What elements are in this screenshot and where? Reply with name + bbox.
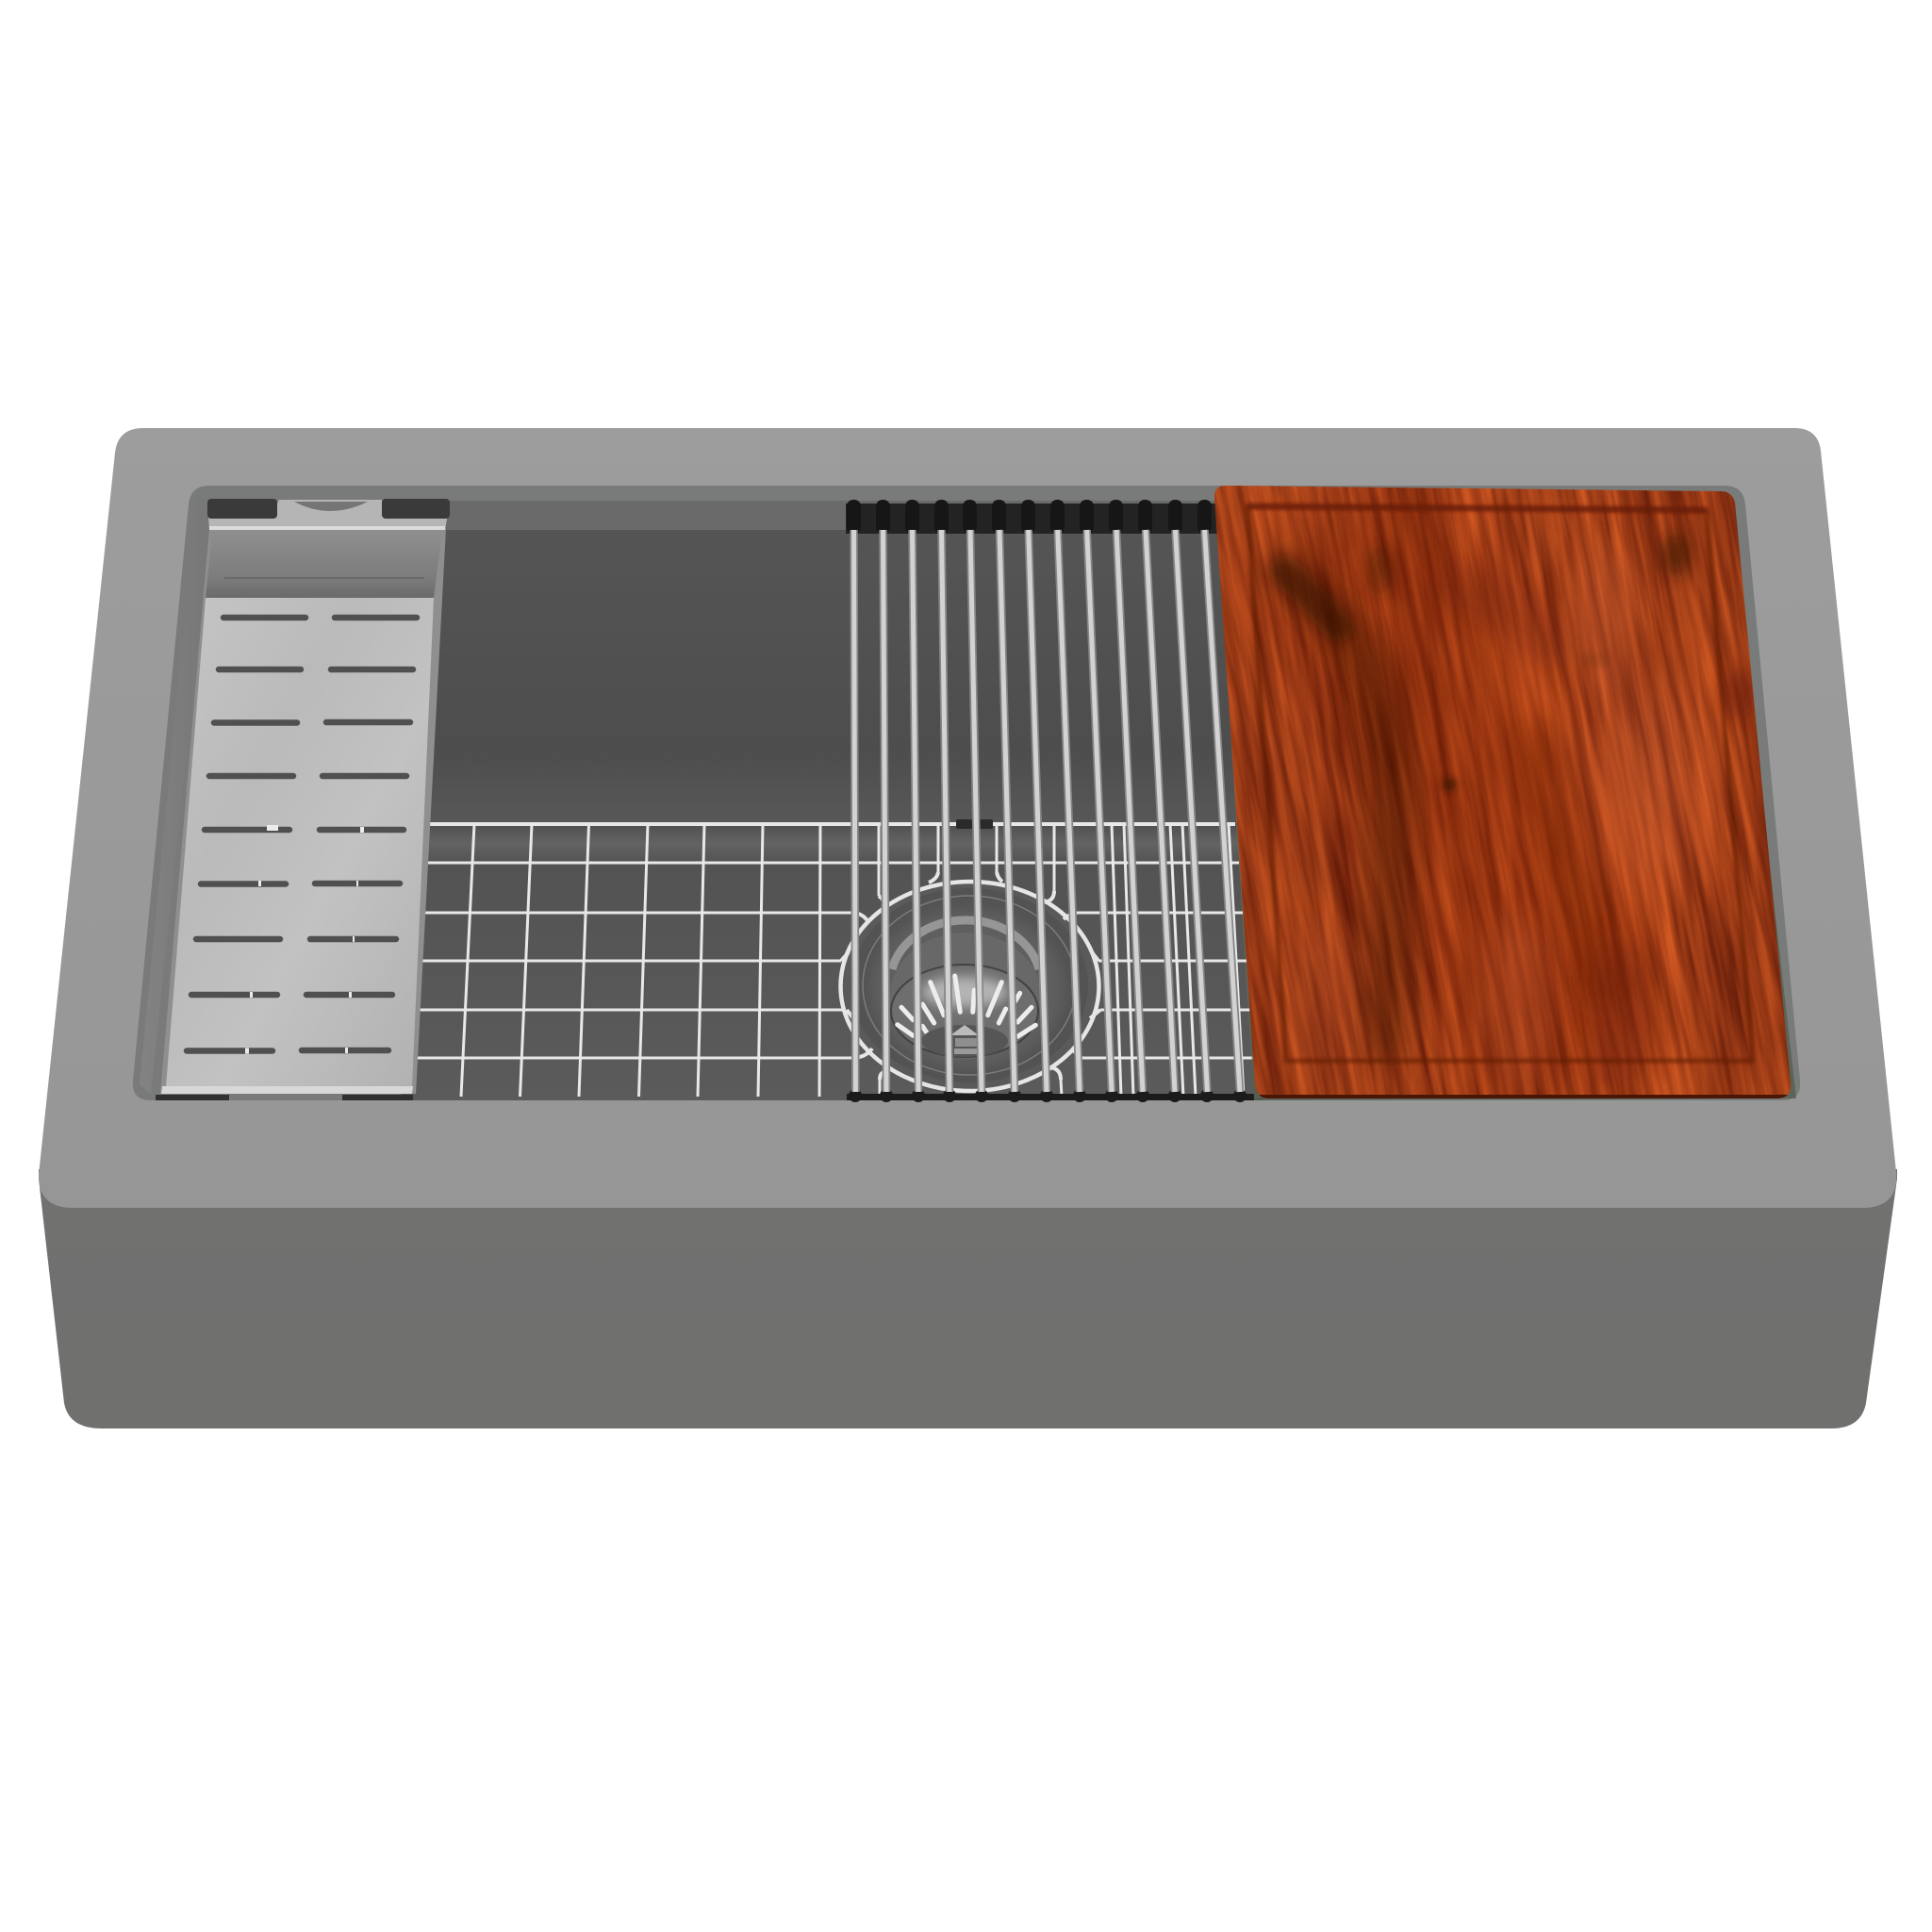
tray slots	[187, 618, 417, 1050]
front right tab	[342, 1095, 413, 1100]
rear left rubber tab	[207, 499, 277, 519]
tray rear bracket	[207, 500, 450, 530]
colander tray	[156, 499, 450, 1100]
strainer basket	[891, 965, 1038, 1057]
tray floor	[166, 598, 434, 1086]
board bottom edge	[1260, 1095, 1788, 1098]
strainer highlight	[921, 977, 1008, 1007]
top shelf ledge	[443, 501, 1235, 530]
front left tab	[156, 1095, 229, 1100]
drain throat	[890, 933, 1041, 1059]
sink top deck	[39, 428, 1896, 1208]
dark wood figure	[1284, 570, 1603, 1037]
bracket notch	[294, 502, 368, 511]
bottom rubber of roll-up rack	[847, 1089, 1254, 1102]
basin well	[133, 486, 1800, 1100]
sink front apron	[39, 1169, 1897, 1428]
wood knots	[1367, 532, 1758, 1089]
flange inner band	[871, 909, 1064, 1067]
top rubber of roll-up rack	[846, 500, 1218, 534]
wooden cutting board	[1214, 486, 1796, 1100]
tray back wall crease	[224, 577, 424, 579]
flange	[850, 888, 1088, 1082]
sliver beside the board	[1216, 509, 1268, 1098]
tray front lip	[161, 1086, 413, 1094]
wood grain texture	[1214, 486, 1792, 1098]
sink product illustration	[39, 428, 1897, 1428]
grid cutout ring	[841, 882, 1099, 1091]
drain assembly	[841, 872, 1100, 1091]
basin floor	[401, 824, 1263, 1100]
juice groove	[1247, 506, 1753, 1061]
groove top channel	[1247, 506, 1707, 510]
roll-up rack rods	[854, 530, 1240, 1092]
throat silver arc	[892, 920, 1039, 969]
wire hooks into ring	[841, 872, 1100, 1080]
lighter wood patches	[1282, 547, 1702, 1084]
rear right rubber tab	[382, 499, 450, 519]
slot highlights	[245, 828, 364, 1050]
wire bottom grid	[414, 824, 1254, 1097]
strainer slots	[898, 976, 1035, 1036]
broad red tone band	[1339, 528, 1565, 1084]
tray rim	[160, 528, 446, 1094]
basin back wall	[420, 530, 1245, 824]
strainer knob	[921, 1025, 1008, 1057]
grid rubber bumper	[956, 819, 993, 829]
flange thin line	[863, 896, 1076, 1075]
tray back wall	[206, 531, 442, 598]
left rim strip of well	[140, 500, 213, 1094]
board shadow edge	[1222, 487, 1796, 1100]
